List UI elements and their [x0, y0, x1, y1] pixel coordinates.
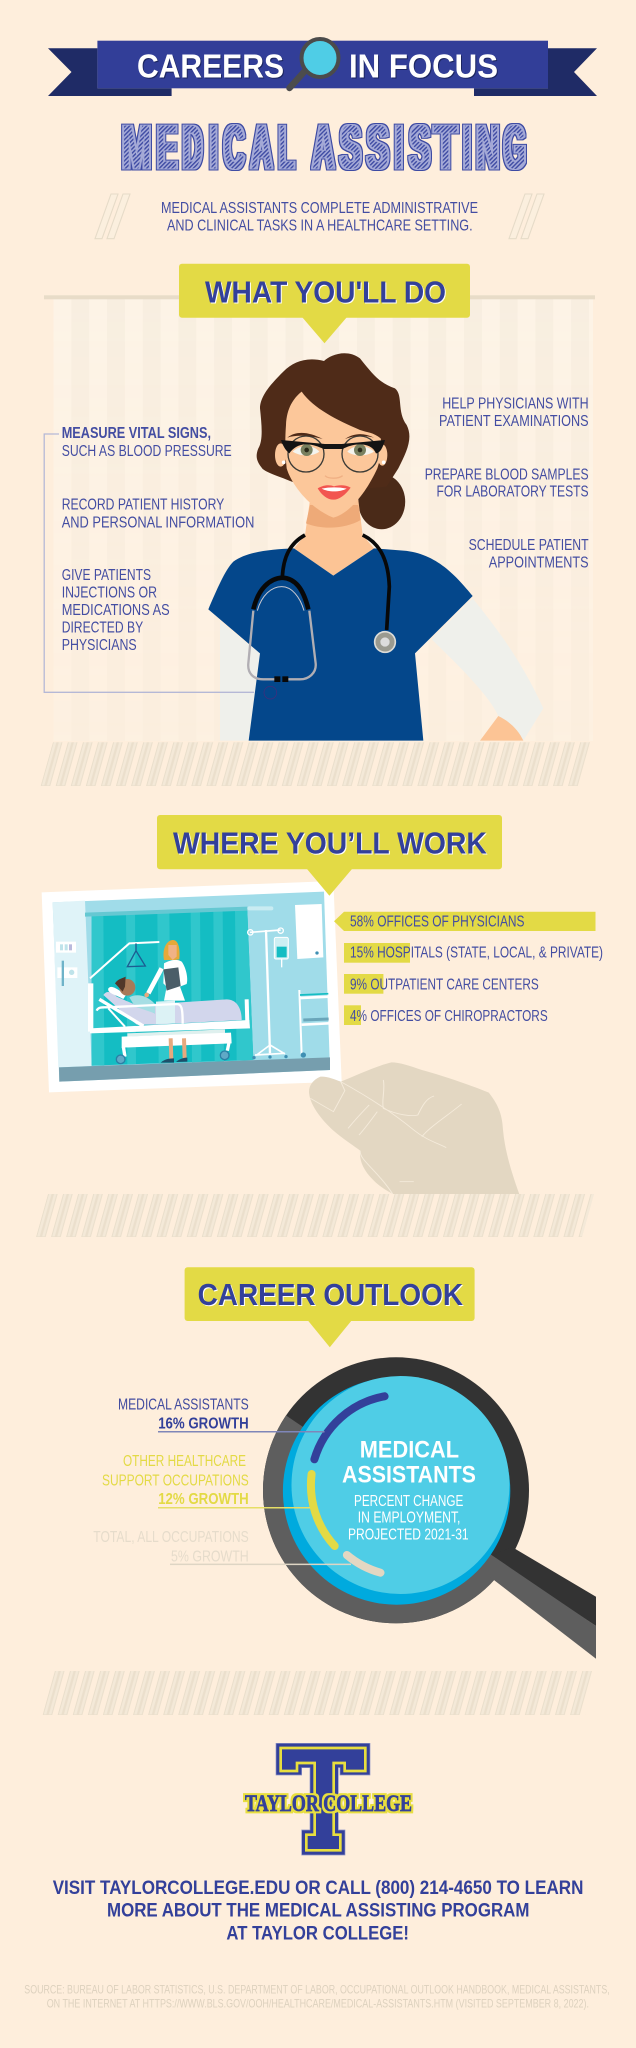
magnifier handle light	[490, 1554, 596, 1659]
bar: offices of physicians: 58% OFFICES OF PHYSICIANS	[350, 914, 524, 931]
magnifier rim and handle dark	[263, 1357, 596, 1626]
main title: C	[224, 114, 244, 183]
call to action: MORE ABOUT THE MEDICAL ASSISTING PROGRAM	[107, 1900, 529, 1922]
bar: outpatient care centers	[344, 974, 539, 994]
text: left tasks: AND PERSONAL INFORMATION	[62, 514, 254, 531]
lens text: IN EMPLOYMENT,	[358, 1510, 460, 1527]
striped panel behind nurse	[44, 295, 595, 452]
header banner	[48, 39, 597, 96]
text: left tasks: RECORD PATIENT HISTORY	[62, 496, 224, 513]
source note	[24, 1983, 610, 2011]
callout heading: career outlook	[185, 1267, 475, 1347]
large magnifying glass	[263, 1357, 596, 1659]
hospital bed	[90, 942, 250, 1064]
lens highlight	[292, 1376, 510, 1594]
magnifier rim light	[263, 1416, 494, 1624]
outlook label: other healthcare: OTHER HEALTHCARE	[123, 1453, 246, 1470]
text: right tasks: PREPARE BLOOD SAMPLES	[425, 466, 589, 483]
main title: A	[312, 114, 334, 183]
hand holding photo	[309, 1062, 519, 1194]
outlook label: medical assistants	[118, 1396, 324, 1433]
nurse body	[208, 500, 543, 741]
photo card with hospital scene	[42, 881, 342, 1092]
outlook label: other healthcare	[102, 1453, 310, 1508]
main title: D	[183, 114, 202, 183]
banner ribbon face	[97, 41, 548, 88]
lens text: ASSISTANTS	[342, 1462, 476, 1489]
main title: I	[210, 114, 217, 183]
decorative slashes left	[95, 194, 130, 239]
outlook label: other healthcare: 12% GROWTH	[158, 1491, 249, 1508]
logo letter T	[276, 1743, 370, 1855]
lens text: PROJECTED 2021-31	[348, 1526, 469, 1543]
college logo	[245, 1743, 412, 1855]
main title: L	[279, 114, 294, 183]
bar chart: where medical assistants work	[334, 912, 603, 1025]
main title: A	[251, 114, 272, 183]
wall cabinet	[295, 904, 323, 959]
slanted divider 3	[43, 1671, 596, 1715]
text: right tasks	[425, 395, 589, 571]
bar: outpatient care centers: 9% OUTPATIENT CARE CENTERS	[350, 976, 539, 993]
banner magnifier icon	[290, 39, 338, 88]
text: left tasks: MEASURE VITAL SIGNS,	[62, 425, 211, 442]
lens text: MEDICAL	[360, 1437, 459, 1464]
nurse hair bun	[358, 474, 405, 529]
banner title: in focus: IN FOCUS	[349, 48, 498, 85]
main title: E	[157, 114, 177, 183]
IV pole	[248, 928, 288, 1059]
outlook label: other healthcare: SUPPORT OCCUPATIONS	[102, 1472, 249, 1489]
growth arcs	[311, 1396, 385, 1573]
left wall panel	[53, 901, 92, 1067]
intro text: AND CLINICAL TASKS IN A HEALTHCARE SETTING.	[167, 218, 473, 235]
text: left tasks: DIRECTED BY	[62, 620, 143, 637]
wall fixtures	[56, 942, 77, 986]
lens text: PERCENT CHANGE	[354, 1493, 463, 1510]
intro text: MEDICAL ASSISTANTS COMPLETE ADMINISTRATIVE	[161, 200, 478, 217]
text: G	[504, 114, 526, 183]
text: left tasks: INJECTIONS OR	[62, 585, 157, 602]
call to action: AT TAYLOR COLLEGE!	[226, 1922, 409, 1944]
supply cart	[299, 990, 329, 1058]
callout heading: career outlook: CAREER OUTLOOK	[198, 1277, 464, 1312]
banner ribbon tails	[48, 48, 597, 96]
text: right tasks: APPOINTMENTS	[489, 554, 589, 571]
text: left tasks: MEDICATIONS AS	[62, 602, 170, 619]
outlook label: medical assistants: 16% GROWTH	[158, 1416, 249, 1433]
outlook label: total all occupations	[93, 1529, 351, 1565]
logo wordmark: TAYLOR COLLEGE	[245, 1791, 412, 1816]
doctor	[144, 940, 187, 1063]
outlook label: total all occupations: 5% GROWTH	[171, 1548, 249, 1565]
text: left tasks: PHYSICIANS	[62, 637, 137, 654]
callout heading: where you'll work	[157, 815, 502, 896]
main title: N	[476, 114, 499, 183]
text: right tasks: PATIENT EXAMINATIONS	[439, 413, 589, 430]
decorative slashes right	[509, 194, 544, 239]
slanted divider 2	[36, 1194, 594, 1237]
main title: I	[395, 114, 403, 183]
callout heading: what you'll do	[179, 264, 470, 343]
lens base	[283, 1377, 510, 1605]
text: left tasks: SUCH AS BLOOD PRESSURE	[62, 443, 232, 460]
outlook label: medical assistants: MEDICAL ASSISTANTS	[118, 1396, 249, 1413]
nurse illustration	[208, 353, 543, 741]
lens text	[342, 1437, 476, 1543]
main title: M	[122, 114, 151, 183]
main title: S	[367, 114, 389, 183]
call to action	[53, 1877, 583, 1944]
main title: T	[434, 114, 457, 183]
main title	[122, 114, 526, 183]
text: right tasks: SCHEDULE PATIENT	[469, 537, 589, 554]
banner title: careers: CAREERS	[137, 48, 284, 85]
main title: S	[340, 114, 361, 183]
text: left tasks	[62, 425, 254, 654]
callout heading: what you'll do: WHAT YOU'LL DO	[205, 275, 446, 310]
main title: S	[409, 114, 430, 183]
room wall	[53, 892, 330, 1082]
callout heading: where you'll work: WHERE YOU’LL WORK	[173, 825, 487, 860]
main title: I	[463, 114, 471, 183]
bar: offices of chiropractors	[344, 1005, 548, 1025]
bracket line	[44, 434, 254, 692]
text: right tasks: HELP PHYSICIANS WITH	[442, 395, 589, 412]
intro text	[161, 200, 478, 235]
stethoscope	[248, 535, 395, 699]
card	[42, 881, 342, 1092]
text: right tasks: FOR LABORATORY TESTS	[436, 484, 589, 501]
nurse head	[257, 353, 409, 528]
text: left tasks: GIVE PATIENTS	[62, 567, 151, 584]
slanted divider 1	[41, 742, 594, 786]
bar: offices of chiropractors: 4% OFFICES OF CHIROPRACTORS	[350, 1008, 548, 1025]
curtain	[85, 906, 273, 1066]
floor	[59, 1057, 330, 1082]
outlook label: total all occupations: TOTAL, ALL OCCUPATIONS	[93, 1529, 249, 1546]
